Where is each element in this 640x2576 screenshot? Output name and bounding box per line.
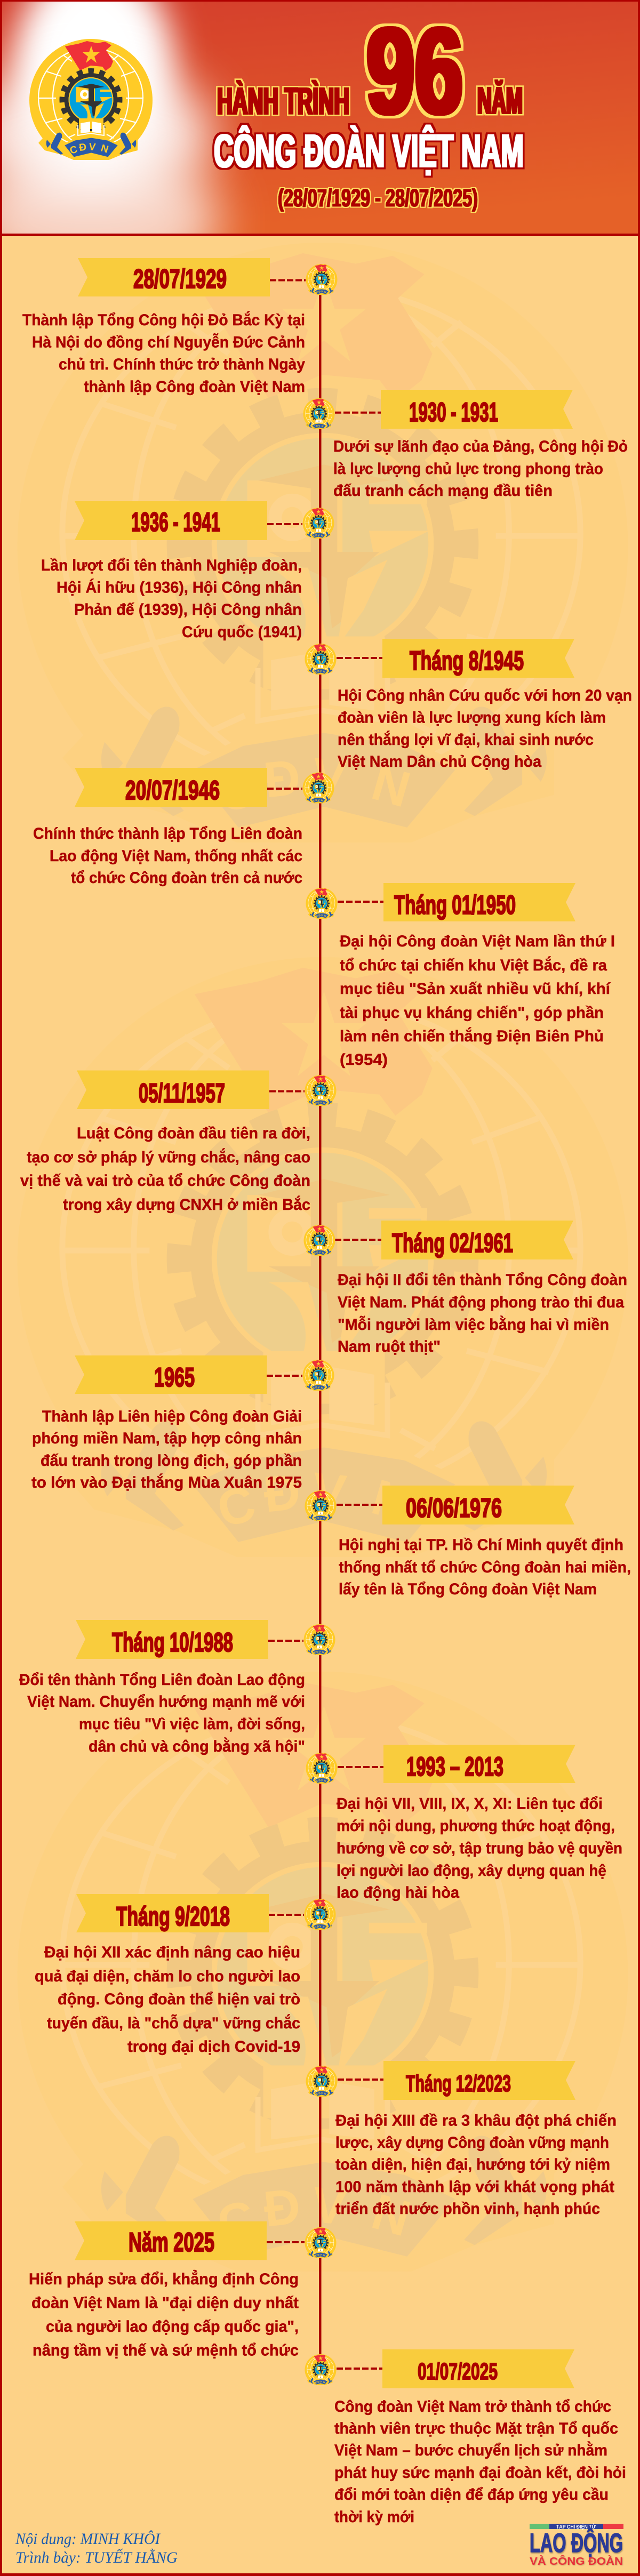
- connector: [337, 2368, 382, 2370]
- subtitle: date range: (28/07/1929 - 28/07/2025): [278, 184, 478, 212]
- date banner: Tháng 9/2018: [116, 1901, 230, 1931]
- footer credits: Trình bày: TUYẾT HẰNG: [15, 2548, 178, 2566]
- date banner: Tháng 8/1945: [410, 646, 524, 676]
- date banner: [382, 1486, 574, 1524]
- description: [334, 2398, 626, 2526]
- description: Hà Nội do đồng chí Nguyễn Đức Cảnh: [32, 333, 305, 351]
- description: tài phục vụ kháng chiến", góp phần: [340, 1004, 604, 1022]
- description: "Mỗi người làm việc bằng hai vì miền: [338, 1315, 609, 1334]
- description: hướng về cơ sở, tập trung bảo vệ quyền: [337, 1840, 622, 1857]
- timeline item: Tháng 12/2023: [306, 2061, 617, 2218]
- date banner: [382, 639, 574, 678]
- timeline item: Tháng 8/1945: [305, 639, 632, 771]
- description: quả đại diện, chăm lo cho người lao: [35, 1968, 300, 1985]
- description: 100 năm thành lập với khát vọng phát: [335, 2178, 614, 2196]
- connector: [267, 2241, 305, 2243]
- icon: emblem: [303, 398, 335, 430]
- date banner: Tháng 01/1950: [394, 890, 516, 920]
- description: của người lao động cấp quốc gia",: [46, 2318, 299, 2336]
- description: tạo cơ sở pháp lý vững chắc, nâng cao: [27, 1148, 310, 1166]
- description: vị thế và vai trò của tổ chức Công đoàn: [20, 1172, 310, 1190]
- description: Đại hội VII, VIII, IX, X, XI: Liên tục đổi: [337, 1795, 603, 1813]
- description: mới nội dung, phương thức hoạt động,: [337, 1817, 615, 1835]
- description: Việt Nam Dân chủ Cộng hòa: [338, 753, 541, 771]
- description: đổi mới toàn diện để đáp ứng yêu cầu: [334, 2486, 609, 2503]
- icon: emblem: [302, 772, 334, 804]
- description: nâng tầm vị thế và sứ mệnh tổ chức: [33, 2342, 299, 2360]
- description: Lao động Việt Nam, thống nhất các: [50, 847, 302, 865]
- description: trong xây dựng CNXH ở miền Bắc: [63, 1195, 310, 1214]
- date banner: Tháng 12/2023: [406, 2071, 511, 2097]
- connector: [337, 657, 382, 659]
- description: [335, 2112, 617, 2218]
- title: nam: NĂM: [477, 80, 523, 122]
- timeline item: 1930 - 1931: [303, 390, 628, 500]
- description: Chính thức thành lập Tổng Liên đoàn: [33, 825, 302, 842]
- timeline item: 1993 – 2013: [306, 1745, 622, 1901]
- date banner: 1930 - 1931: [409, 397, 498, 427]
- timeline item: 20/07/1946: [33, 768, 334, 887]
- timeline item: 06/06/1976: [305, 1486, 631, 1598]
- description: Thành lập Tổng Công hội Đỏ Bắc Kỳ tại: [22, 311, 305, 329]
- description: [33, 825, 302, 887]
- description: tuyến đầu, là "chỗ dựa" vững chắc: [47, 2014, 300, 2032]
- date banner: [75, 1355, 267, 1394]
- background watermark emblems: [18, 243, 628, 2280]
- icon: emblem: [303, 1225, 335, 1256]
- description: thời kỳ mới: [334, 2508, 414, 2526]
- description: đoàn viên là lực lượng xung kích làm: [338, 709, 606, 726]
- date banner: Năm 2025: [129, 2227, 214, 2257]
- date banner: [77, 1071, 269, 1109]
- timeline item: Tháng 10/1988: [19, 1620, 335, 1755]
- description: [338, 687, 632, 771]
- description: nên thắng lợi vĩ đại, khai sinh nước: [338, 731, 594, 749]
- description: phát huy sức mạnh đại đoàn kết, đòi hỏi: [334, 2464, 626, 2482]
- description: Thành lập Liên hiệp Công đoàn Giải: [42, 1408, 302, 1425]
- description: [35, 1944, 300, 2056]
- description: Lần lượt đổi tên thành Nghiệp đoàn,: [41, 557, 302, 574]
- timeline item: Tháng 01/1950: [306, 883, 615, 1069]
- description: Đổi tên thành Tổng Liên đoàn Lao động: [19, 1671, 305, 1689]
- connector: [267, 1375, 302, 1377]
- icon: emblem: [306, 264, 338, 295]
- description: to lớn vào Đại thắng Mùa Xuân 1975: [31, 1473, 302, 1491]
- description: mục tiêu "Sản xuất nhiều vũ khí, khí: [340, 980, 611, 998]
- description: Hiến pháp sửa đổi, khẳng định Công: [29, 2270, 299, 2288]
- date banner: 1936 - 1941: [131, 507, 220, 537]
- description: [339, 1536, 631, 1598]
- description: Đại hội II đổi tên thành Tổng Công đoàn: [338, 1271, 627, 1289]
- description: [340, 933, 615, 1069]
- description: làm nên chiến thắng Điện Biên Phủ: [340, 1027, 604, 1045]
- connector: [268, 1640, 303, 1642]
- icon: emblem: [305, 2354, 337, 2386]
- description: Đại hội XIII đề ra 3 khâu đột phá chiến: [335, 2112, 617, 2130]
- date banner: [383, 2061, 575, 2100]
- publisher logo: Lao Dong va Cong Doan: [530, 2523, 623, 2567]
- date banner: 20/07/1946: [125, 775, 220, 805]
- footer credits: [15, 2530, 178, 2566]
- description: tổ chức tại chiến khu Việt Bắc, đề ra: [340, 956, 607, 974]
- icon: emblem: [305, 1490, 337, 1522]
- description: toàn diện, hiện đại, hướng tới kỷ niệm: [335, 2156, 610, 2173]
- description: lấy tên là Tổng Công đoàn Việt Nam: [339, 1580, 597, 1598]
- description: Việt Nam. Chuyển hướng mạnh mẽ với: [27, 1693, 305, 1711]
- date banner: [76, 1894, 269, 1932]
- date banner: Tháng 02/1961: [392, 1228, 513, 1258]
- description: dân chủ và công bằng xã hội": [89, 1737, 305, 1755]
- description: thành viên trực thuộc Mặt trận Tổ quốc: [334, 2420, 618, 2437]
- description: Việt Nam – bước chuyển lịch sử nhằm: [334, 2441, 607, 2459]
- icon: emblem: [304, 1899, 336, 1930]
- description: lao động hài hòa: [337, 1884, 459, 1901]
- description: [22, 311, 305, 396]
- description: Công đoàn Việt Nam trở thành tổ chức: [334, 2398, 611, 2415]
- description: [41, 557, 302, 641]
- publisher logo: Lao Dong va Cong Doan: VÀ CÔNG ĐOÀN: [530, 2555, 623, 2567]
- connector: [267, 523, 302, 525]
- description: Luật Công đoàn đầu tiên ra đời,: [77, 1125, 310, 1142]
- description: Nam ruột thịt": [338, 1338, 441, 1355]
- date banner: [381, 390, 573, 429]
- date banner: [382, 2349, 574, 2388]
- connector: [335, 412, 381, 414]
- description: thống nhất tổ chức Công đoàn hai miền,: [339, 1559, 631, 1576]
- header banner: [2, 2, 638, 234]
- timeline item: Năm 2025: [29, 2221, 337, 2360]
- description: triển đất nước phồn vinh, hạnh phúc: [335, 2200, 600, 2218]
- date banner: [383, 1745, 575, 1783]
- description: thành lập Công đoàn Việt Nam: [84, 378, 305, 396]
- date banner: [75, 501, 267, 540]
- icon: emblem: [306, 888, 338, 919]
- publisher logo: Lao Dong va Cong Doan: TẠP CHÍ ĐIỆN TỬ: [556, 2523, 596, 2530]
- icon: emblem: [302, 508, 334, 539]
- connector: [270, 279, 306, 282]
- description: lợi người lao động, xây dựng quan hệ: [337, 1862, 606, 1880]
- timeline item: Tháng 9/2018: [35, 1894, 336, 2056]
- timeline item: 28/07/1929: [22, 258, 338, 396]
- date banner: 1993 – 2013: [406, 1752, 503, 1781]
- icon: emblem: [303, 1624, 335, 1656]
- description: Hội Ái hữu (1936), Hội Công nhân: [57, 578, 302, 596]
- description: [29, 2270, 299, 2360]
- icon: trade union emblem: [29, 39, 153, 162]
- description: đấu tranh trong lòng địch, góp phần: [41, 1452, 302, 1470]
- description: động. Công đoàn thể hiện vai trò: [58, 1991, 300, 2008]
- description: Hội nghị tại TP. Hồ Chí Minh quyết định: [339, 1536, 623, 1554]
- icon: emblem: [305, 2227, 337, 2259]
- description: Đại hội Công đoàn Việt Nam lần thứ I: [340, 933, 615, 950]
- description: là lực lượng chủ lực trong phong trào: [333, 460, 603, 478]
- description: đoàn Việt Nam là "đại diện duy nhất: [31, 2294, 299, 2312]
- description: Việt Nam. Phát động phong trào thi đua: [338, 1294, 624, 1311]
- icon: emblem: [302, 1360, 334, 1391]
- icon: emblem: [305, 644, 337, 675]
- date banner: [75, 2221, 267, 2260]
- date banner: Tháng 10/1988: [112, 1627, 233, 1657]
- description: phóng miền Nam, tập hợp công nhân: [32, 1430, 302, 1447]
- description: [19, 1671, 305, 1755]
- connector: [267, 788, 302, 790]
- connector: [335, 1239, 381, 1241]
- connector: [338, 1766, 383, 1768]
- title: hanh trinh: HÀNH TRÌNH: [217, 81, 349, 123]
- description: mục tiêu "Vì việc làm, đời sống,: [79, 1715, 305, 1733]
- connector: [269, 1914, 304, 1916]
- description: [337, 1795, 622, 1901]
- icon: emblem: [305, 1075, 337, 1106]
- icon: emblem: [306, 2066, 338, 2097]
- date banner: 01/07/2025: [418, 2358, 498, 2385]
- description: Cứu quốc (1941): [182, 623, 302, 641]
- description: [31, 1408, 302, 1491]
- description: chủ trì. Chính thức trở thành Ngày: [59, 356, 305, 373]
- timeline item: 1965: [31, 1355, 334, 1491]
- date banner: 06/06/1976: [406, 1493, 502, 1523]
- timeline item: 05/11/1957: [20, 1071, 337, 1214]
- description: [338, 1271, 627, 1355]
- description: đấu tranh cách mạng đầu tiên: [333, 482, 553, 500]
- timeline item: 01/07/2025: [305, 2349, 626, 2526]
- timeline vertical line: [319, 295, 321, 2358]
- date banner: [76, 1620, 268, 1659]
- description: Dưới sự lãnh đạo của Đảng, Công hội Đỏ: [333, 438, 628, 455]
- description: (1954): [340, 1051, 388, 1069]
- footer credits: Nội dung: MINH KHÔI: [15, 2530, 161, 2548]
- timeline item: Tháng 02/1961: [303, 1221, 627, 1355]
- icon: emblem: [306, 1753, 338, 1784]
- title: number 96: 96: [366, 2, 463, 140]
- date banner: [78, 258, 270, 296]
- description: trong đại dịch Covid-19: [127, 2038, 300, 2056]
- date banner: 28/07/1929: [133, 264, 227, 294]
- date banner: 05/11/1957: [139, 1078, 225, 1108]
- description: Phản đế (1939), Hội Công nhân: [74, 601, 302, 619]
- date banner: 1965: [154, 1362, 195, 1392]
- description: tổ chức Công đoàn trên cả nước: [71, 869, 302, 887]
- connector: [338, 2079, 383, 2081]
- description: [333, 438, 628, 500]
- connector: [337, 1504, 382, 1506]
- date banner: [75, 768, 267, 807]
- connector: [338, 901, 383, 903]
- timeline item: 1936 - 1941: [41, 501, 334, 641]
- description: Đại hội XII xác định nâng cao hiệu: [44, 1944, 300, 1961]
- description: [20, 1125, 310, 1214]
- description: lược, xây dựng Công đoàn vững mạnh: [335, 2134, 609, 2152]
- connector: [269, 1090, 305, 1092]
